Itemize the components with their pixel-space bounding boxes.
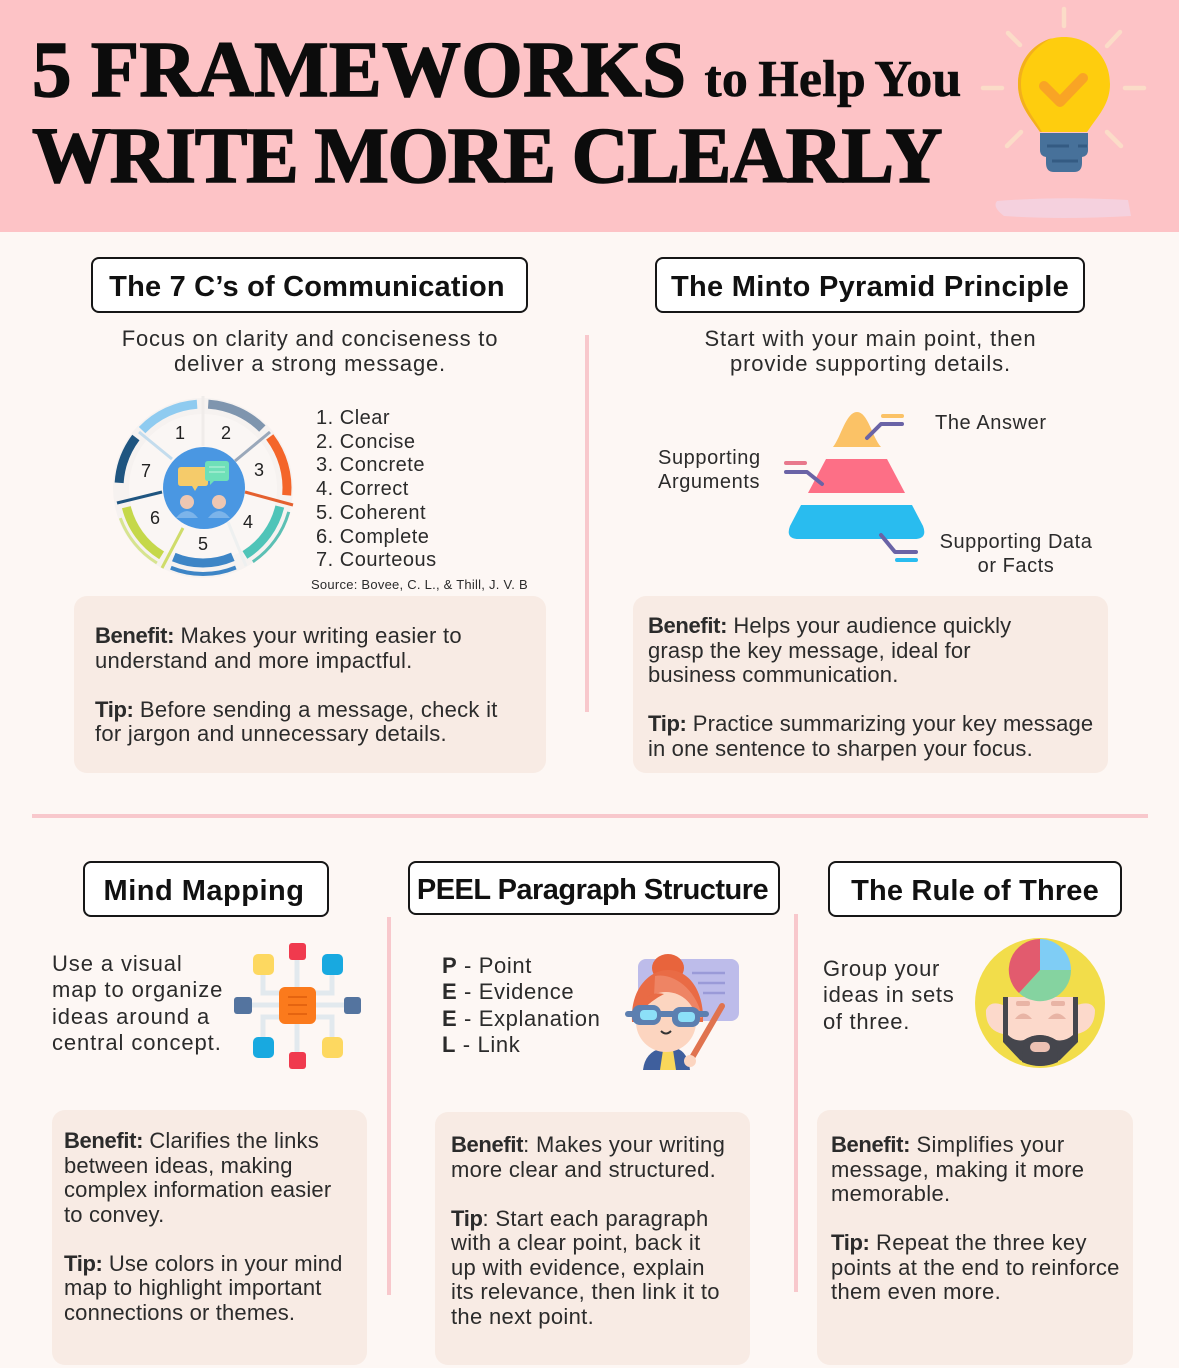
text: 7 Cs benefit and tip: Benefit: Makes your writing easier to understand and more impactful. Tip: Before sending a message, check it for jargon and unnecessary details. xyxy=(95,623,498,746)
chart: 7 Cs wheel: 2 xyxy=(221,423,231,443)
label: supporting arguments: Supporting Arguments xyxy=(658,447,761,493)
heading: PEEL xyxy=(408,861,780,915)
icon: teacher xyxy=(625,954,739,1070)
panel: PEEL benefit and tip xyxy=(435,1112,750,1365)
label: the answer: The Answer xyxy=(935,412,1047,434)
heading: Mind Mapping: Mind Mapping xyxy=(104,875,304,907)
label: supporting data: Supporting Data or Facts xyxy=(940,531,1092,577)
icon: mind map xyxy=(234,943,361,1069)
panel: 7 Cs benefit and tip xyxy=(74,596,546,773)
panel: Rule of Three benefit and tip xyxy=(817,1110,1133,1365)
text: PEEL benefit and tip: Benefit: Makes your writing more clear and structured. Tip: Start each paragraph with a clear point, back it up with evidence, explain its relevance, then link it to the next point. xyxy=(451,1132,725,1328)
title line 1: 5 FRAMEWORKS to Help You xyxy=(32,27,962,114)
wheel spokes xyxy=(117,396,293,568)
chart: 7 Cs wheel: 4 xyxy=(243,512,253,532)
text: Mind Mapping intro: Use a visual map to organize ideas around a central concept. xyxy=(52,951,223,1055)
wheel center xyxy=(163,447,245,529)
chart: 7 Cs wheel: 3 xyxy=(254,460,264,480)
panel: Minto benefit and tip xyxy=(633,596,1108,773)
title line 2: WRITE MORE CLEARLY xyxy=(32,113,941,200)
heading: Minto xyxy=(655,257,1085,313)
icon: light bulb with check xyxy=(980,6,1146,218)
list: PEEL: P - Point E - Evidence E - Explanation L - Link xyxy=(442,953,601,1057)
icon: head with pie chart xyxy=(975,938,1105,1068)
heading: Minto: The Minto Pyramid Principle xyxy=(671,271,1069,303)
heading: 7 Cs xyxy=(91,257,528,313)
list: 7 Cs: 1. Clear 2. Concise 3. Concrete 4. Correct 5. Coherent 6. Complete 7. Courteous xyxy=(310,407,437,571)
text: Minto intro: Start with your main point, then provide supporting details. xyxy=(704,326,1037,376)
chart: 7 Cs wheel xyxy=(114,396,294,576)
heading: Mind Mapping xyxy=(83,861,329,917)
header band xyxy=(0,0,1179,232)
heading: Rule of Three xyxy=(828,861,1122,917)
text: Minto benefit and tip: Benefit: Helps your audience quickly grasp the key message, ideal for business communication. Tip: Practice summarizing your key message in one sentence to sharpen your focus. xyxy=(648,613,1093,760)
text: 7 Cs intro: Focus on clarity and conciseness to deliver a strong message. xyxy=(122,326,498,376)
chart: 7 Cs wheel: 5 xyxy=(198,534,208,554)
wheel numbers: 1 xyxy=(175,423,185,443)
heading: PEEL: PEEL Paragraph Structure xyxy=(417,874,768,906)
source note: Source: Bovee, C. L., & Thill, J. V. B xyxy=(311,577,528,592)
chart: 7 Cs wheel: 7 xyxy=(141,461,151,481)
text: Mind Mapping benefit and tip: Benefit: Clarifies the links between ideas, making complex information easier to convey. Tip: Use colors in your mind map to highlight important connections or themes. xyxy=(64,1128,343,1324)
chart: pyramid xyxy=(784,412,924,562)
chart: 7 Cs wheel: 6 xyxy=(150,508,160,528)
panel: Mind Mapping benefit and tip xyxy=(52,1110,367,1365)
heading: 7 Cs: The 7 C’s of Communication xyxy=(109,271,505,303)
text: Rule of Three benefit and tip: Benefit: Simplifies your message, making it more memorable. Tip: Repeat the three key points at the end to reinforce them even more. xyxy=(831,1132,1120,1304)
text: Rule of Three intro: Group your ideas in sets of three. xyxy=(823,956,954,1034)
heading: Rule of Three: The Rule of Three xyxy=(851,875,1099,907)
divider lines xyxy=(585,335,589,712)
wheel arcs xyxy=(82,367,324,609)
